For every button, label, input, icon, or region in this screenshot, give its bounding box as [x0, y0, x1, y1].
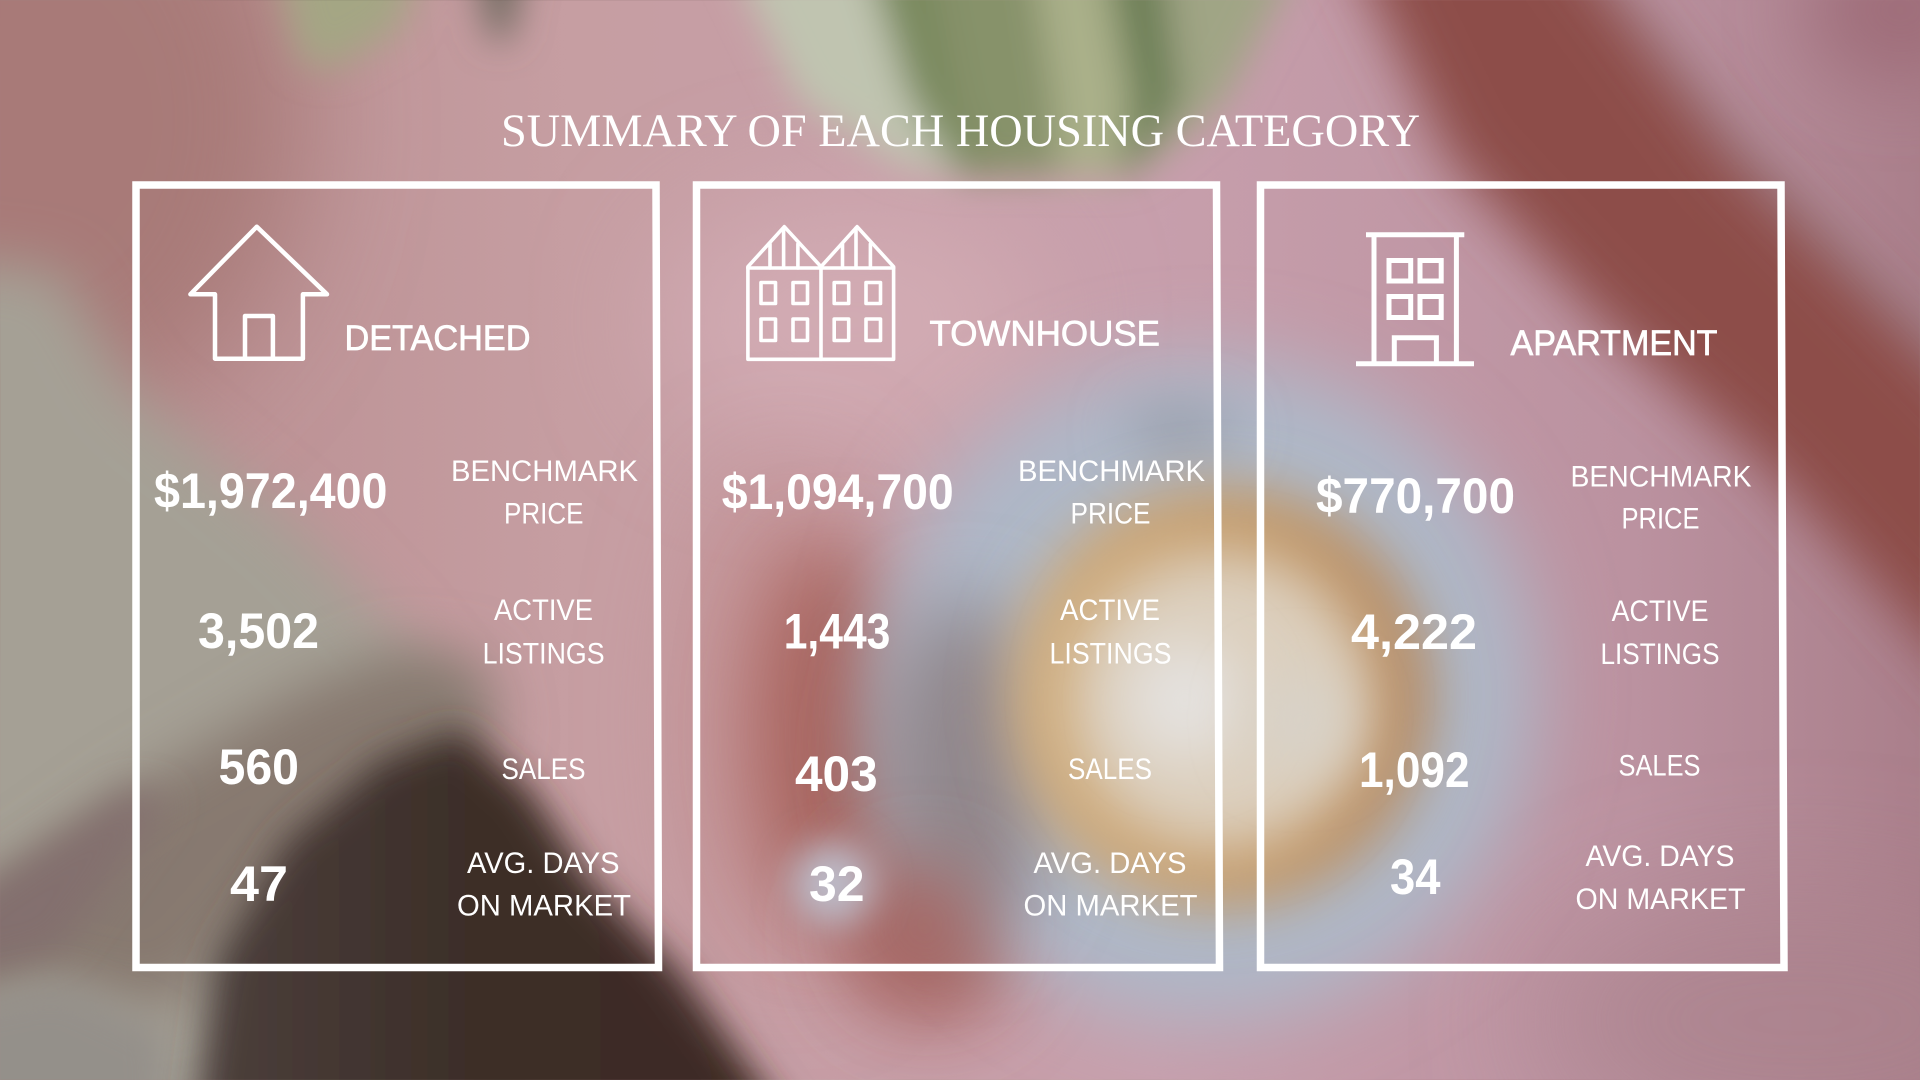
active listings label: LISTINGS — [1600, 638, 1720, 671]
active listings label: ACTIVE — [494, 594, 593, 627]
active listings label: LISTINGS — [1050, 638, 1172, 670]
benchmark price label: BENCHMARK — [1570, 460, 1752, 494]
sales value: 1,092 — [1359, 742, 1470, 798]
icon: apartment building — [1356, 235, 1474, 364]
active listings value: 3,502 — [198, 603, 319, 659]
active listings label — [483, 594, 605, 670]
average days label: AVG. DAYS — [1034, 847, 1186, 880]
active listings value: 4,222 — [1351, 604, 1477, 660]
average days value: 47 — [230, 856, 288, 912]
benchmark price label: PRICE — [1622, 502, 1700, 536]
title: SUMMARY OF EACH HOUSING CATEGORY — [501, 105, 1420, 157]
benchmark price label: PRICE — [1070, 498, 1150, 530]
average days value: 34 — [1390, 849, 1441, 905]
benchmark price label — [1570, 460, 1752, 536]
benchmark price label: BENCHMARK — [1018, 455, 1205, 488]
panel: townhouse — [696, 185, 1220, 968]
sales value: 560 — [218, 739, 299, 795]
average days value: 32 — [809, 856, 865, 912]
icon: house — [190, 227, 327, 359]
icon: townhouse — [748, 227, 894, 359]
benchmark price label: PRICE — [504, 498, 584, 530]
active listings label: LISTINGS — [483, 638, 605, 670]
benchmark price value: $1,972,400 — [154, 463, 388, 519]
active listings label: ACTIVE — [1060, 594, 1160, 627]
heading: apartment: APARTMENT — [1510, 323, 1718, 363]
average days label — [457, 847, 631, 922]
average days label: ON MARKET — [1576, 883, 1746, 916]
sales value: 403 — [795, 746, 878, 802]
sales label: SALES — [1618, 750, 1700, 782]
benchmark price value: $770,700 — [1316, 468, 1515, 524]
panel: apartment — [1260, 185, 1784, 968]
benchmark price label — [451, 455, 638, 530]
average days label: ON MARKET — [1024, 890, 1198, 922]
active listings value: 1,443 — [784, 604, 890, 660]
sales label: SALES — [502, 753, 586, 786]
average days label: ON MARKET — [457, 890, 631, 922]
average days label — [1024, 847, 1198, 922]
heading: detached: DETACHED — [344, 318, 530, 358]
benchmark price value: $1,094,700 — [722, 464, 954, 520]
panel: detached — [136, 185, 658, 968]
active listings label — [1600, 595, 1720, 671]
active listings label: ACTIVE — [1612, 595, 1709, 628]
average days label: AVG. DAYS — [1586, 840, 1734, 873]
average days label — [1576, 840, 1746, 916]
benchmark price label: BENCHMARK — [451, 455, 638, 488]
average days label: AVG. DAYS — [467, 847, 620, 880]
benchmark price label — [1018, 455, 1205, 530]
heading: townhouse: TOWNHOUSE — [930, 314, 1160, 354]
active listings label — [1050, 594, 1172, 670]
sales label: SALES — [1068, 753, 1152, 786]
